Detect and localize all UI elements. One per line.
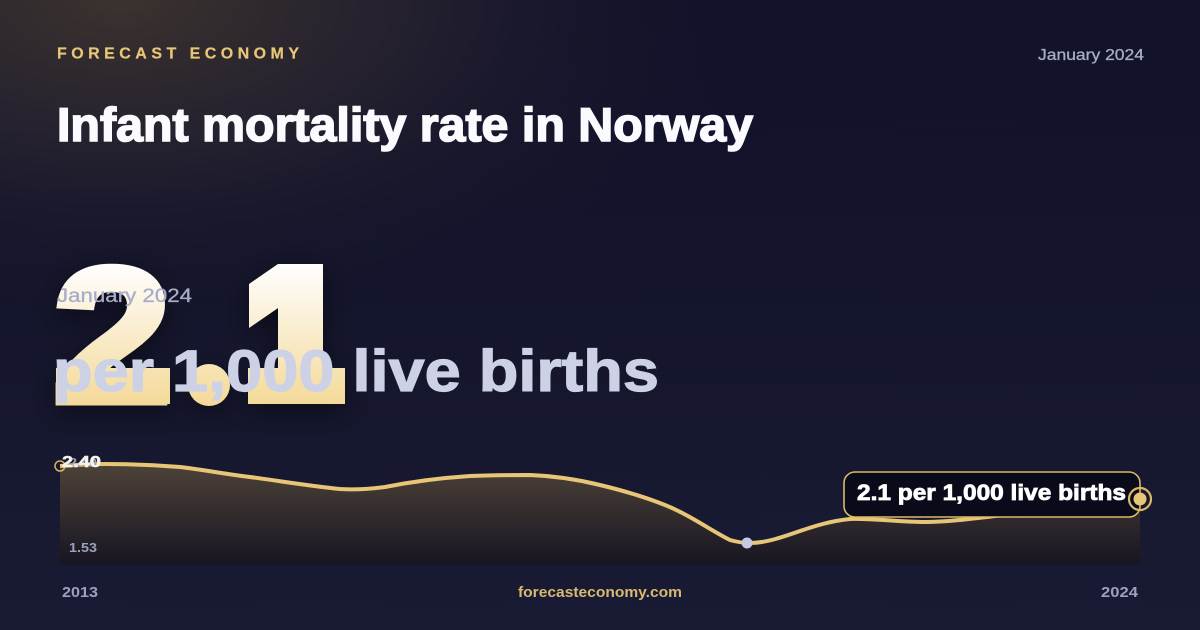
date under value: January 2024	[57, 286, 192, 307]
callout	[844, 472, 1140, 517]
digit two: 2	[52, 227, 172, 443]
date top right: January 2024	[1038, 47, 1144, 64]
start marker	[55, 461, 65, 471]
big value	[52, 227, 345, 443]
line	[60, 464, 1140, 543]
chart	[55, 454, 1151, 565]
source url: forecasteconomy.com	[518, 584, 682, 601]
title: Infant mortality rate in Norway	[57, 98, 753, 151]
decimal point	[188, 364, 230, 406]
area fill	[60, 464, 1140, 565]
unit text: per 1,000 live births	[53, 339, 659, 404]
end year: 2024	[1101, 584, 1139, 601]
max label: 2.40	[62, 454, 101, 471]
brand label: FORECAST ECONOMY	[57, 46, 299, 62]
max label shadow copy: 2.40	[69, 455, 97, 470]
digit one: 1	[244, 238, 344, 439]
start year: 2013	[62, 584, 98, 601]
callout: 2.1 per 1,000 live births	[857, 480, 1126, 505]
min label: 1.53	[69, 540, 97, 555]
end marker	[1129, 488, 1151, 510]
low point marker	[742, 538, 752, 548]
